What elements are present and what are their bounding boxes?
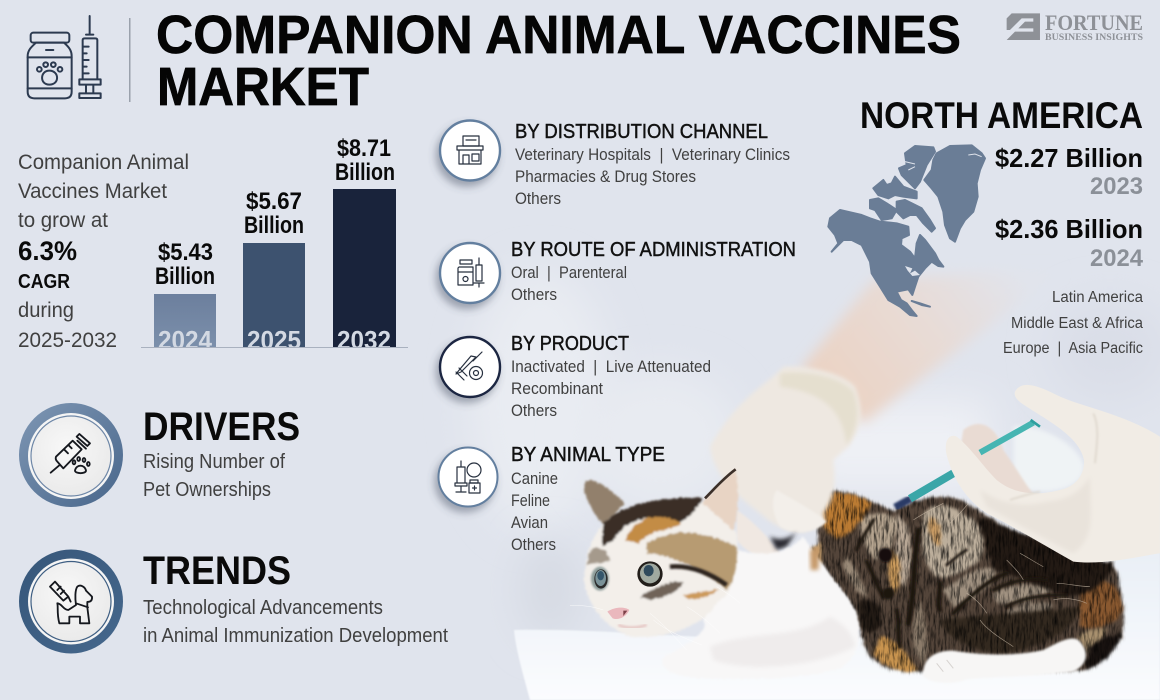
description [143,597,448,647]
icon: vial and syringe [440,243,500,303]
value 2023: $2.27 Billion [995,143,1143,173]
items: Feline [511,492,550,510]
fur stripes [857,520,1067,647]
description: Rising Number of [143,451,285,473]
items: Veterinary Hospitals | Veterinary Clinics [515,146,790,164]
table cloth [514,552,1160,700]
items: Avian [511,514,548,532]
panel: trends [19,549,448,654]
vet forearm [800,270,1060,423]
bar 2025 [243,188,305,355]
value 2024 [995,214,1144,272]
nose and mouth [607,608,629,619]
CAGR text block [18,151,189,352]
other regions: Latin America [1052,289,1143,306]
bar 2024 [154,239,216,355]
ears and mask [584,469,738,637]
panel: by animal type [438,444,665,554]
other regions [1003,289,1143,357]
items: Others [511,536,556,554]
description [143,451,285,501]
items [511,358,711,420]
light fur strands [913,503,1090,647]
eyes [591,567,609,591]
bar chart: market size [141,135,408,355]
panel: drivers [19,403,300,507]
photo: vet vaccinating a kitten [470,270,1160,700]
white chest and front leg [662,510,859,679]
items: Inactivated | Live Attenuated [511,358,711,376]
other regions: Middle East & Africa [1011,315,1143,332]
items [515,146,790,208]
photo background [470,270,1160,640]
header divider [129,18,130,102]
bar 2032: Billion [335,159,395,186]
heading: DRIVERS [143,405,300,449]
panel: by route of administration [440,239,796,304]
header icon: jar and syringe [28,16,101,98]
CAGR text block: Vaccines Market [18,180,167,203]
heading: BY PRODUCT [511,333,629,355]
syringe barrel behind fingers [895,473,953,507]
logo: Fortune Business Insights: FORTUNE [1045,10,1143,35]
kitten chest and head [570,469,859,679]
bar 2025: 2025 [247,325,301,355]
value 2023 [995,143,1143,200]
title [156,5,961,117]
tabby coat [810,490,1125,673]
cotton background inside right hand [1013,426,1084,492]
items: Canine [511,470,558,488]
kitten body [810,490,1125,683]
logo: Fortune Business Insights: BUSINESS INSIGHTS [1045,33,1143,43]
logo: Fortune Business Insights [1007,10,1143,43]
panel: by distribution channel [440,120,790,208]
heading: BY ANIMAL TYPE [511,444,665,466]
head [570,469,740,650]
items: Recombinant [511,380,603,398]
map: North America [828,145,985,316]
bar 2024: Billion [155,263,215,290]
title: MARKET [157,57,369,117]
value 2024: 2024 [1090,245,1144,272]
icon: dog and syringe badge [19,550,123,654]
logo mark [1007,13,1040,40]
items: Others [511,286,557,304]
items: Others [511,402,557,420]
panel: regional insights [828,95,1144,357]
bar 2032: 2032 [337,325,391,355]
other regions: Europe | Asia Pacific [1003,340,1143,357]
icon: syringe and virus [440,337,500,397]
CAGR text block: 2025-2032 [18,329,117,352]
bar 2032 [333,135,396,355]
bar 2025: $5.67 [246,188,302,215]
description: Technological Advancements [143,597,383,619]
CAGR text block: to grow at [18,209,108,232]
CAGR text block: during [18,299,74,322]
value 2023: 2023 [1090,173,1143,200]
rear white paw [923,638,1086,683]
items [511,470,558,554]
icon: syringe and paw badge [19,403,123,507]
CAGR text block: Companion Animal [18,151,189,174]
items [511,264,627,304]
whiskers [570,587,740,650]
title: COMPANION ANIMAL VACCINES [156,5,961,65]
description: in Animal Immunization Development [143,625,448,647]
icon: veterinary clinic [440,120,500,180]
items: Oral | Parenteral [511,264,627,282]
items: Others [515,190,561,208]
left glove [710,366,861,532]
CAGR text block: 6.3% [18,236,77,266]
items: Pharmacies & Drug Stores [515,168,696,186]
bar 2024: $5.43 [158,239,213,266]
bar 2025: Billion [244,212,304,239]
CAGR text block: CAGR [18,271,70,293]
value 2024: $2.36 Billion [995,214,1143,244]
description: Pet Ownerships [143,479,271,501]
heading: BY DISTRIBUTION CHANNEL [515,121,768,143]
panel: by product [440,333,711,420]
right glove [946,385,1160,563]
icon: syringe, paw and vial [438,448,498,506]
heading: TRENDS [143,549,291,593]
heading: BY ROUTE OF ADMINISTRATION [511,239,796,261]
bar 2032: $8.71 [337,135,391,162]
bar 2024: 2024 [158,325,213,355]
